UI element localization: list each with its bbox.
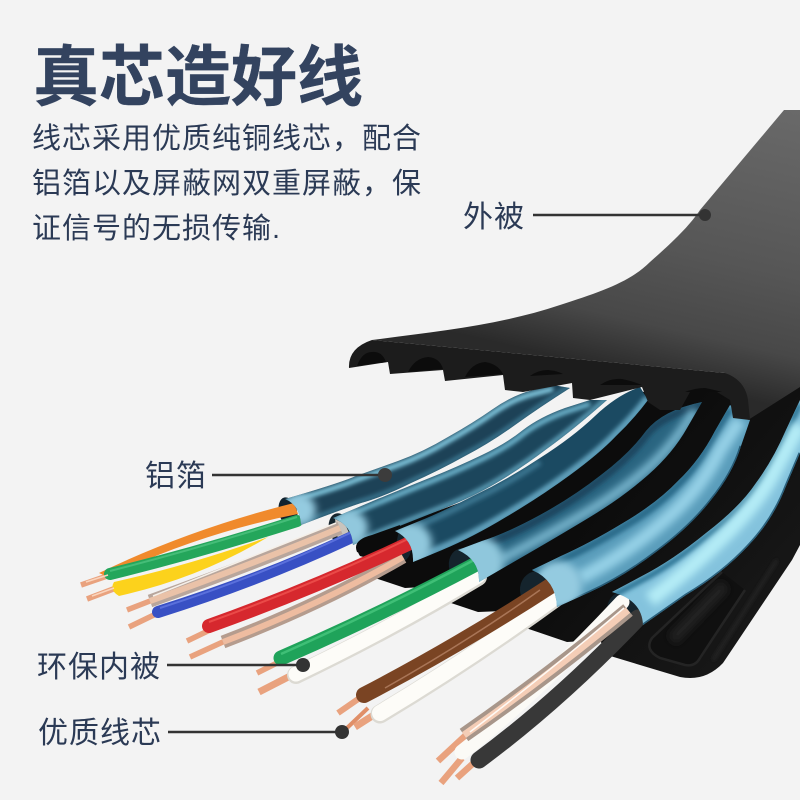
outer jacket top surface	[372, 110, 800, 420]
title: 真芯造好线	[33, 40, 363, 114]
label: inner jacket	[37, 651, 310, 684]
cable bundle 1: orange, green, yellow	[81, 495, 301, 599]
label: aluminium foil: 铝箔	[145, 460, 207, 493]
label: quality core	[38, 717, 349, 750]
description text: 线芯采用优质纯铜线芯，配合	[32, 122, 422, 155]
copper tips	[81, 575, 110, 585]
tube 4	[458, 402, 702, 582]
label: inner jacket: 环保内被	[37, 651, 161, 684]
description text	[32, 122, 422, 245]
description text: 证信号的无损传输.	[32, 212, 281, 245]
tube 2	[333, 400, 607, 545]
label: quality core: 优质线芯	[38, 717, 162, 750]
cable bundle 6: copper, white, black	[438, 587, 647, 783]
jacket front face with arches	[349, 340, 750, 420]
copper tips	[438, 735, 466, 761]
copper tips	[338, 695, 364, 713]
tube 6	[612, 400, 800, 625]
copper tips	[257, 660, 283, 673]
tube 1	[285, 386, 570, 525]
copper tips	[187, 629, 212, 641]
label: outer jacket	[463, 201, 711, 234]
label: outer jacket: 外被	[463, 201, 525, 234]
cable bundle 3: red, copper	[187, 525, 415, 657]
tube 3	[395, 388, 648, 562]
tube 5	[530, 400, 755, 610]
cable diagram	[81, 110, 800, 783]
cable bundle 4: green, white	[257, 545, 483, 692]
label: aluminium foil	[145, 460, 392, 493]
cable bundle 5: brown, white	[338, 567, 560, 728]
cable bundle 2: copper, blue	[127, 511, 355, 627]
description text: 铝箔以及屏蔽网双重屏蔽，保	[32, 167, 422, 200]
lower black jacket body	[358, 385, 800, 678]
copper tips	[127, 601, 150, 610]
